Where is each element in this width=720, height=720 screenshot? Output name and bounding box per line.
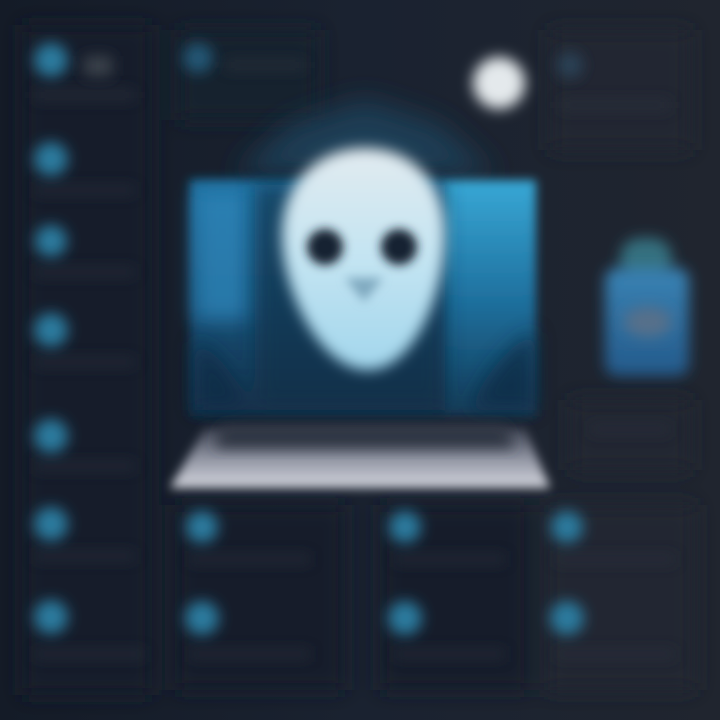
keyboard: [215, 425, 515, 448]
icon: skull: [282, 148, 445, 370]
padlock keyhole: [624, 307, 672, 337]
glow above laptop: [235, 100, 495, 175]
skull eyes: [307, 229, 417, 265]
skull face: [282, 148, 445, 370]
laptop: [170, 180, 550, 488]
icon: padlock: [605, 238, 689, 376]
skull nose: [345, 278, 383, 302]
left column bullets: [34, 43, 68, 634]
top heading bullet and label: [84, 43, 583, 78]
padlock shackle: [620, 238, 672, 283]
screen left highlight: [195, 190, 250, 320]
white circle icon: [473, 57, 525, 109]
bottom row bullets: [185, 511, 584, 635]
laptop screen: [190, 180, 536, 416]
padlock body: [605, 268, 689, 376]
laptop base: [170, 428, 550, 488]
text placeholder bars: [35, 60, 675, 658]
screen dark lower waves: [195, 185, 535, 410]
